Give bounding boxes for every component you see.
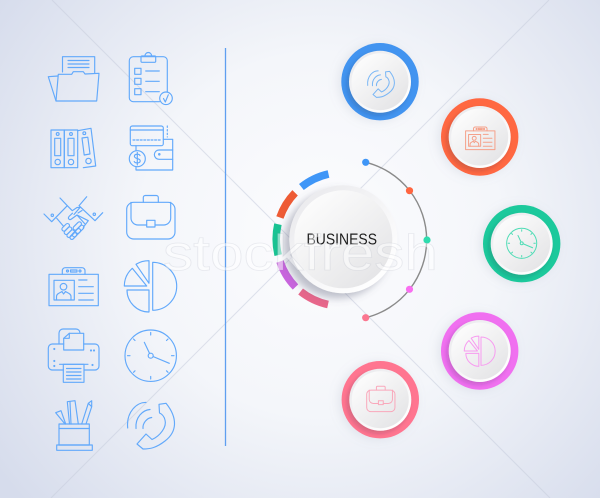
icon: clipboard checklist [129,53,172,105]
node: pink [362,314,369,321]
icon: folder [48,57,99,101]
badge: clock [483,205,560,282]
segment: purple [280,262,296,287]
icon: id card [49,268,98,306]
node: magenta [406,286,413,293]
icon: wallet and card [129,126,173,170]
central arc connector [362,159,431,321]
segment: green [276,224,278,255]
node: blue [362,159,369,166]
icon: briefcase [127,196,175,239]
node: green [423,236,431,244]
central business disk [289,185,397,293]
watermark: stockfresh [163,225,438,281]
central segmented ring [276,174,328,304]
icon: handshake [44,197,103,240]
icon: printer [48,329,99,382]
badge: briefcase [342,361,419,438]
vertical divider [224,48,226,446]
icon: pencil cup [56,401,92,450]
segment: pink [301,292,328,304]
left icon grid [44,53,177,450]
node: orange [406,187,413,194]
badge: id card [441,98,518,176]
icon: telephone [128,402,175,449]
title: business: BUSINESS [306,232,377,248]
segment: orange [280,193,295,218]
segment: blue [301,174,328,187]
badge: telephone [341,43,419,120]
icon: clock [125,330,176,381]
icon: binders [51,128,96,168]
badge: pie chart [441,312,518,390]
icon: pie chart [124,261,177,312]
